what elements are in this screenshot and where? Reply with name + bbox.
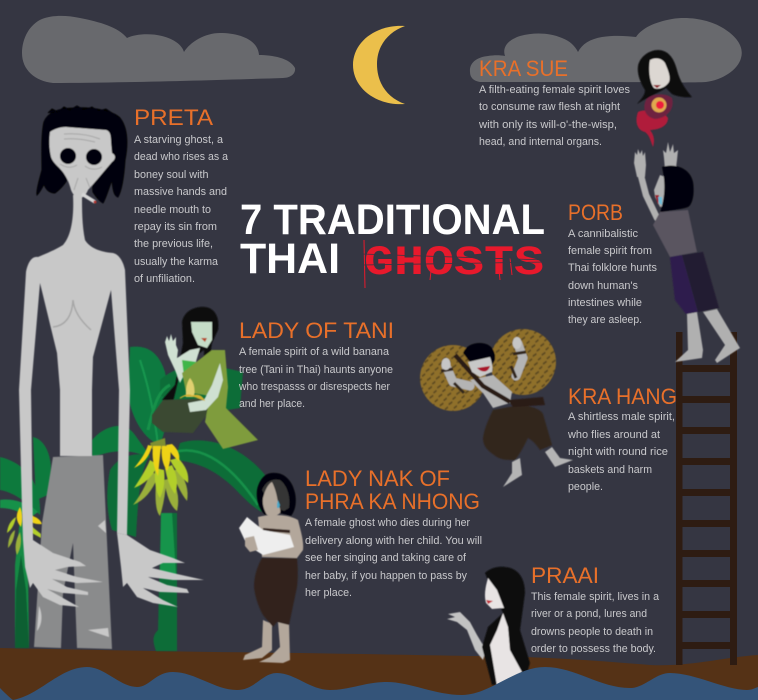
Tani top (182, 352, 216, 392)
Nak torso (258, 515, 303, 558)
Preta text block: massive hands and (134, 186, 227, 198)
Kra Hang text block: people. (568, 481, 603, 493)
bananas, left bunch (7, 507, 42, 555)
Nak pants (254, 558, 298, 627)
Preta eyes (60, 148, 76, 164)
Nak hair (257, 473, 296, 516)
Kra Hang ghost (420, 329, 573, 487)
Kra Sue organs (636, 110, 668, 147)
Kra Sue text block: KRA SUE (479, 56, 568, 81)
Lady Nak text block: see her singing and taking care of (305, 552, 467, 564)
Kra Sue text block: A filth-eating female spirit loves (479, 84, 630, 96)
Praai face (485, 578, 504, 609)
Tani arm and banana (188, 363, 223, 412)
Kra Sue text block: head, and internal organs. (479, 136, 602, 148)
Lady of Tani text block: A female spirit of a wild banana (239, 346, 390, 358)
Kra Hang text block: who flies around at (567, 429, 660, 441)
Kra Sue text block: to consume raw flesh at night (479, 101, 620, 113)
Praai text block: drowns people to death in (531, 626, 653, 638)
Preta left hand (23, 540, 103, 607)
Porb text block (568, 200, 657, 326)
Porb face (654, 175, 668, 207)
Kra Hang pants (483, 405, 552, 460)
Porb text block: Thai folklore hunts (568, 262, 657, 274)
water (0, 667, 758, 700)
Lady Nak text block: LADY NAK OF (305, 466, 450, 491)
Preta head (49, 127, 115, 198)
right cloud (470, 18, 742, 82)
Praai text block: This female spirit, lives in a (531, 591, 660, 603)
Kra Hang arms (446, 344, 523, 386)
Praai body (490, 613, 522, 686)
Porb text block: down human's (568, 280, 638, 292)
Kra Hang text block: night with round rice (568, 446, 668, 458)
Praai hair (482, 567, 530, 685)
Kra Hang strap (455, 355, 510, 402)
Praai text block (531, 563, 660, 655)
Preta pants (34, 455, 112, 649)
Porb text block: intestines while (568, 297, 642, 309)
Kra Hang legs (503, 447, 573, 487)
Preta ghost (19, 106, 204, 649)
Lady Nak text block: her baby, if you happen to pass by (305, 570, 467, 582)
Lady Nak text block: delivery along with her child. You will (305, 535, 482, 547)
Praai text block: river or a pond, lures and (531, 608, 647, 620)
Kra Sue text block (478, 56, 630, 148)
Porb shirt (653, 210, 697, 257)
Nak face (263, 482, 280, 516)
Lady Nak text block: her place. (305, 587, 352, 599)
Lady of Tani text block: who trespasss or disrespects her (238, 381, 390, 393)
title: 7 TRADITIONAL (240, 196, 545, 244)
Kra Hang text block: baskets and harm (568, 464, 652, 476)
Kra Hang torso (470, 375, 512, 408)
title word: ghosts: GHOSTS (364, 239, 544, 287)
Preta text block: the previous life, (134, 238, 213, 250)
left cloud (22, 16, 295, 83)
Porb hair (660, 166, 694, 213)
Nak legs (243, 620, 290, 663)
Kra Hang baskets (420, 345, 486, 411)
Lady Nak ghost (239, 473, 303, 663)
Lady of Tani text block (238, 318, 394, 410)
title: THAI (240, 235, 340, 283)
Preta text block: boney soul with (134, 169, 208, 181)
Preta hair (37, 106, 127, 203)
Tani raised hand (165, 334, 200, 383)
Preta text block: A starving ghost, a (134, 134, 224, 146)
Praai text block: order to possess the body. (531, 643, 656, 655)
Nak baby (239, 517, 294, 555)
Lady of Tani text block: LADY OF TANI (239, 318, 394, 343)
Porb text block: female spirit from (568, 245, 652, 257)
Kra Hang text block: A shirtless male spirit, (568, 411, 675, 423)
Lady Nak text block: PHRA KA NHONG (305, 489, 480, 514)
Lady Nak text block: A female ghost who dies during her (305, 517, 470, 529)
Preta text block (134, 105, 229, 285)
Praai arm (447, 612, 486, 660)
Preta text block: of unfiliation. (134, 273, 195, 285)
Porb ghost (634, 142, 740, 363)
Kra Hang head (463, 343, 495, 373)
Porb arms (640, 172, 657, 218)
ladder (676, 332, 737, 665)
bananas, right bunch (133, 438, 188, 516)
Praai ghost (447, 567, 530, 686)
Kra Hang text block (567, 384, 677, 493)
Porb skirt (670, 255, 698, 314)
Tani sash (182, 350, 258, 449)
Lady of Tani text block: tree (Tani in Thai) haunts anyone (239, 364, 393, 376)
Porb text block: A cannibalistic (568, 228, 638, 240)
Preta right hand (117, 533, 204, 607)
Preta body (19, 195, 130, 540)
Porb text block: PORB (568, 200, 623, 225)
Tani face (191, 322, 212, 348)
title (240, 196, 545, 288)
Porb text block: they are asleep. (568, 314, 642, 326)
Kra Sue ghost (636, 50, 692, 147)
ground (0, 648, 758, 700)
Kra Sue text block: with only its will-o'-the-wisp, (478, 119, 617, 131)
Preta text block: usually the karma (134, 256, 219, 268)
crescent moon (353, 26, 405, 104)
Lady of Tani ghost (152, 307, 258, 449)
Preta cigarette (82, 194, 95, 202)
Preta text block: PRETA (134, 105, 213, 130)
Porb legs (675, 309, 740, 363)
Preta text block: dead who rises as a (134, 151, 229, 163)
Lady of Tani text block: and her place. (239, 398, 305, 410)
Preta text block: repay its sin from (134, 221, 217, 233)
Preta text block: needle mouth to (134, 204, 211, 216)
Praai text block: PRAAI (531, 563, 599, 588)
Tani skirt (152, 398, 213, 433)
banana plants (0, 347, 267, 651)
Lady Nak text block (305, 466, 482, 599)
Kra Hang text block: KRA HANG (568, 384, 677, 409)
